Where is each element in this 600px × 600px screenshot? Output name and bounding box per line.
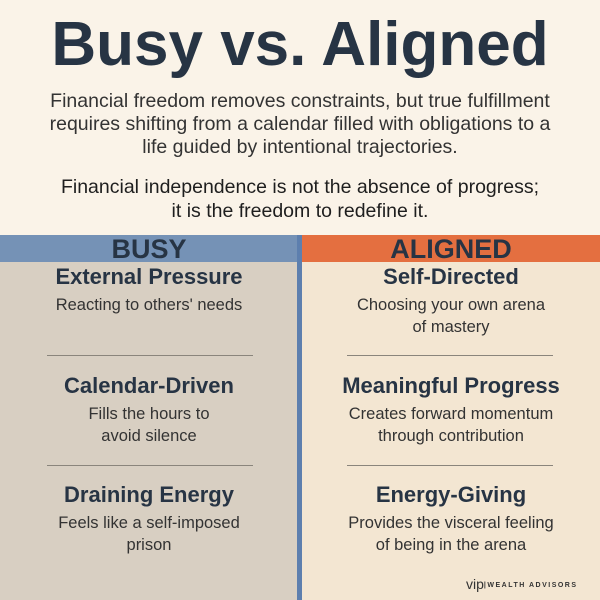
header: busy [0, 235, 298, 262]
logo: vip|WEALTH ADVISORS [466, 576, 578, 592]
subtitle: Financial freedom removes constraints, but true fulfillment [50, 90, 550, 112]
header: busy: BUSY [111, 234, 186, 264]
aligned item 3: of being in the arena [376, 536, 526, 554]
aligned item 1: Choosing your own arena [357, 296, 545, 314]
aligned item 1: Self-Directed [383, 264, 519, 289]
quote [61, 176, 539, 222]
aligned item 3 [348, 482, 554, 554]
busy item 1 [55, 264, 243, 314]
busy item 3: prison [127, 536, 171, 554]
panel: aligned [302, 235, 600, 600]
busy item 3: Feels like a self-imposed [58, 514, 240, 532]
busy item 1: Reacting to others' needs [56, 296, 242, 314]
aligned item 1: of mastery [412, 318, 490, 336]
busy item 2: Fills the hours to [88, 405, 210, 423]
busy item 3: Draining Energy [64, 482, 234, 507]
panel: busy [0, 235, 298, 600]
aligned item 2 [342, 373, 560, 445]
header: aligned: ALIGNED [390, 234, 512, 264]
aligned item 1 [357, 264, 546, 336]
aligned item 2: through contribution [378, 427, 524, 445]
title: Busy vs. Aligned [51, 10, 549, 79]
aligned item 2: Creates forward momentum [349, 405, 553, 423]
busy item 1: External Pressure [55, 264, 243, 289]
subtitle [50, 90, 550, 158]
aligned item 3: Energy-Giving [376, 482, 526, 507]
header: aligned [302, 235, 600, 262]
busy item 3 [58, 482, 240, 554]
busy item 2: Calendar-Driven [64, 373, 234, 398]
aligned item 3: Provides the visceral feeling [348, 514, 554, 532]
quote: it is the freedom to redefine it. [172, 200, 428, 222]
busy item 2 [64, 373, 234, 445]
busy item 2: avoid silence [101, 427, 197, 445]
aligned item 2: Meaningful Progress [342, 373, 560, 398]
subtitle: requires shifting from a calendar filled with obligations to a [50, 113, 550, 135]
quote: Financial independence is not the absence of progress; [61, 176, 539, 198]
subtitle: life guided by intentional trajectories. [142, 136, 458, 158]
